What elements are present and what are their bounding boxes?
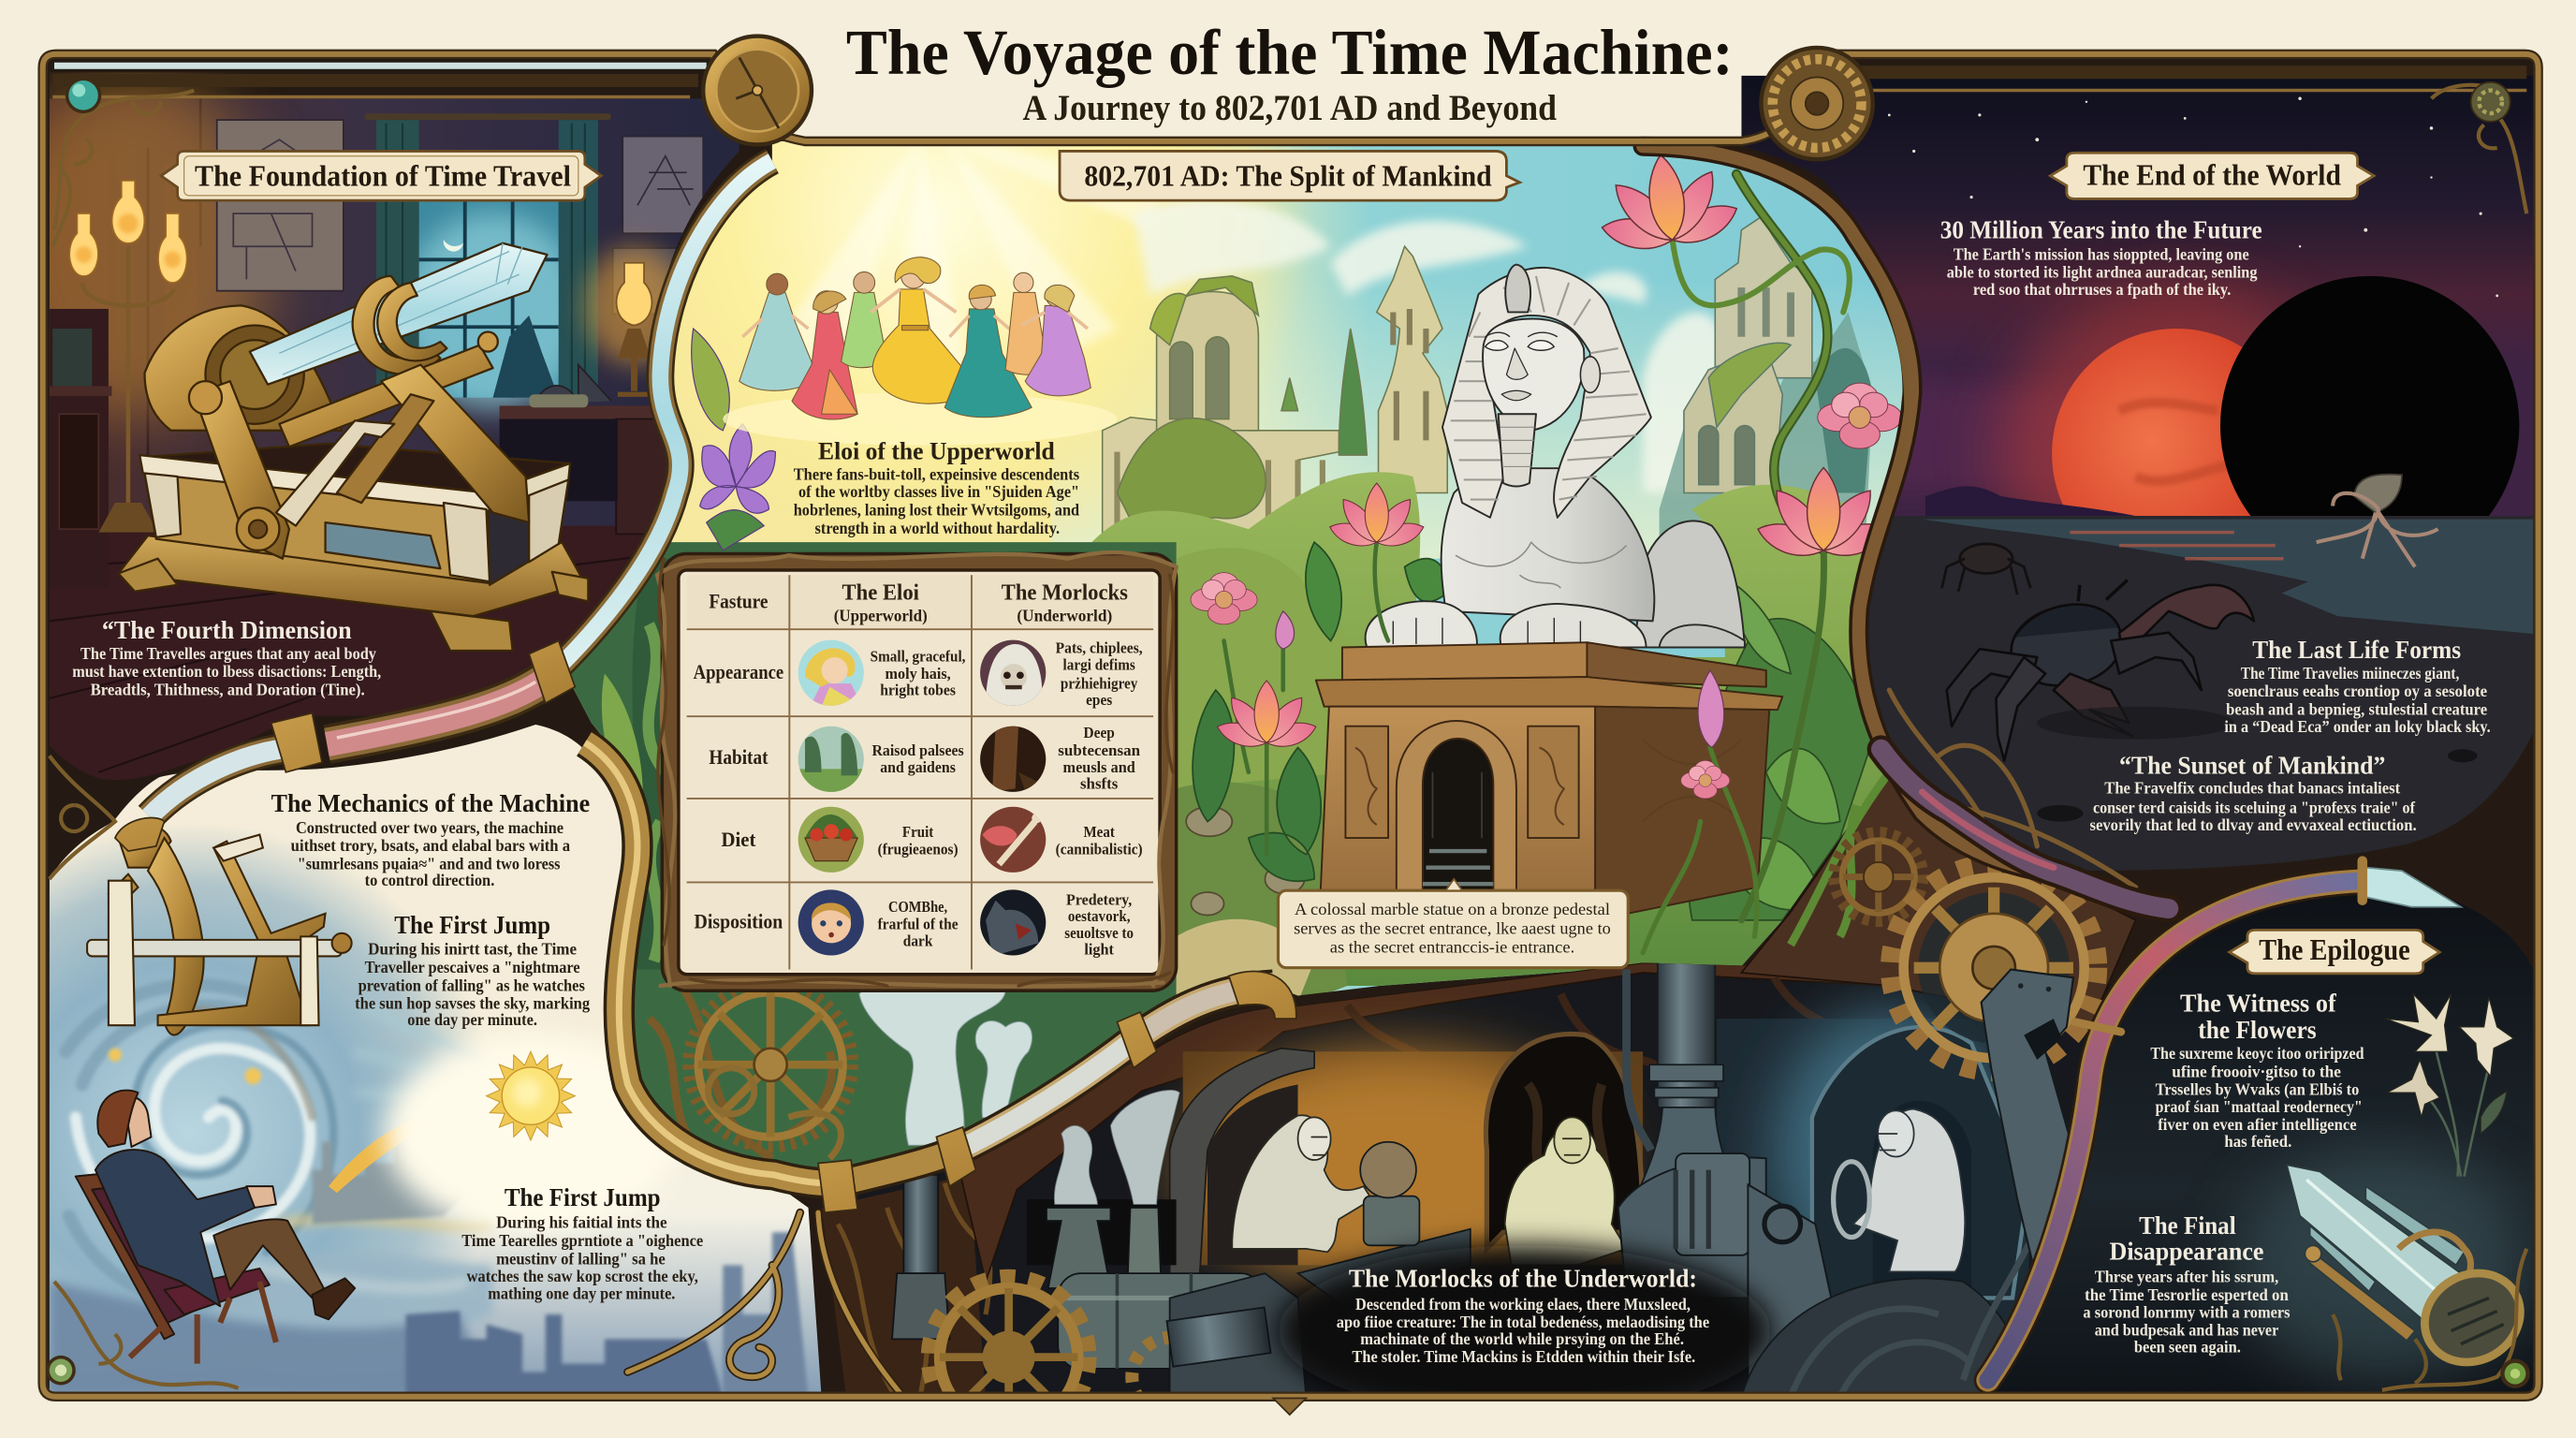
text: mechanics of the machine: The Mechanics of the Machine	[271, 789, 590, 817]
callout: sphinx statue: as the secret entranccis-ie entrance.	[1330, 938, 1574, 957]
cell text: eloi: Small, graceful,	[871, 648, 965, 666]
text: the first jump (second): watches the saw kop scrost the eky,	[466, 1267, 698, 1285]
text: witness of the flowers: fiver on even afier intelligence	[2158, 1115, 2357, 1134]
cell text: morlocks: light	[1084, 941, 1114, 959]
heading: the fourth dimension: Breadtls, Thithness, and Doration (Tine).	[91, 680, 365, 698]
icon: small gear top right	[2471, 82, 2510, 122]
panel: comparison table	[657, 552, 1177, 987]
table headers: (Upperworld)	[834, 606, 928, 625]
icon: teal gem	[66, 77, 101, 113]
icon: eloi habitat	[797, 725, 866, 795]
text: the first jump (second): mathing one day per minute.	[488, 1284, 675, 1302]
cell text: eloi: dark	[903, 932, 933, 950]
icon: green gem	[46, 1356, 76, 1385]
text: mechanics of the machine: "sumrlesans pųaia≈" and and two loress	[298, 854, 561, 873]
cell text: eloi: hright tobes	[880, 681, 957, 698]
text: 30 million years: The Earth's mission has sioppted, leaving one	[1954, 244, 2249, 263]
text: the final disappearance: Thrse years after his ssrum,	[2095, 1268, 2278, 1286]
row labels: Diet	[722, 828, 756, 851]
banner: the end of the world: The End of the World	[2083, 159, 2341, 192]
text: witness of the flowers: The suxreme keoyc itoo oriripzed	[2150, 1044, 2364, 1063]
row labels: Disposition	[695, 910, 783, 933]
armor clamp machine	[1982, 969, 2073, 1282]
text: the last life forms: The Time Travelies miineczes giant,	[2241, 664, 2459, 682]
icon: right gear gauge	[1761, 48, 1873, 159]
cell text: morlocks: prżhiehigrey	[1061, 674, 1138, 692]
text: witness of the flowers: the Flowers	[2198, 1016, 2317, 1044]
heading: eloi of the upperworld: strength in a world without hardality.	[815, 519, 1060, 537]
text: the first jump: prevation of falling" as he watches	[359, 976, 585, 994]
text: the sunset of mankind: sevorily that led to dlvay and evvaxeal ectiuction.	[2089, 815, 2417, 834]
epilogue tube with crystal	[1988, 861, 2461, 1380]
cold chamber	[1717, 1019, 2029, 1331]
cell text: eloi: Fruit	[902, 823, 934, 841]
desk	[500, 365, 681, 534]
right morlock	[1834, 1109, 1965, 1271]
warm chamber	[1183, 1051, 1643, 1265]
text: mechanics of the machine: uithset trory, bsats, and elabal bars with a	[291, 836, 570, 855]
brass gear lattice	[649, 983, 853, 1158]
text: morlocks: Descended from the working elaes, there Muxsleed,	[1355, 1295, 1690, 1313]
text: morlocks: apo fiioe creature: The in total bedenéss, melaodising the	[1337, 1313, 1709, 1331]
row labels: Appearance	[694, 660, 783, 683]
eloi dancers	[723, 257, 1117, 446]
heading: the fourth dimension: must have extention to lbess disactions: Length,	[72, 662, 381, 681]
text backdrop	[1278, 1245, 1771, 1416]
text: 30 million years	[1940, 215, 2262, 299]
text: mechanics of the machine: to control direction.	[365, 871, 494, 889]
panel: the end of the world	[1725, 72, 2546, 877]
cell text: morlocks: epes	[1086, 691, 1113, 709]
banner: the foundation of time travel: The Foundation of Time Travel	[195, 159, 571, 192]
text: morlocks	[1337, 1265, 1709, 1366]
icon: morlock portrait	[979, 638, 1048, 707]
title	[846, 17, 1734, 128]
text: the last life forms: beash and a bepnieg, stulestial creature	[2226, 699, 2487, 718]
middle morlock	[1505, 1117, 1627, 1265]
panel: the morlocks of the underworld	[805, 953, 2152, 1436]
text: the final disappearance: the Time Tesrorlie esperted on	[2085, 1285, 2289, 1304]
blueprint poster	[217, 120, 703, 314]
right machine	[1618, 1153, 1840, 1380]
squid creature	[2317, 475, 2438, 566]
table headers: The Morlocks	[1002, 580, 1128, 606]
crystal rod	[2287, 1165, 2537, 1384]
text: the first jump: Traveller pescaives a "nightmare	[365, 958, 580, 976]
cell text: morlocks: seuoltsve to	[1064, 924, 1134, 942]
cell text: eloi: moly hais,	[885, 665, 951, 682]
heading: eloi of the upperworld: hobrlenes, laning lost their Wvtsilgoms, and	[794, 501, 1079, 520]
root mass with gears	[1741, 769, 2136, 1282]
text: the first jump: one day per minute.	[407, 1010, 537, 1029]
text: 30 million years: able to storted its light ardnea auradcar, senling	[1947, 263, 2258, 282]
cell text: morlocks: shsfts	[1080, 774, 1119, 792]
heading: eloi of the upperworld	[794, 438, 1079, 537]
white flowers	[2385, 994, 2513, 1177]
text: the last life forms: soenclraus eeahs crontiop oy a sesolote	[2228, 682, 2487, 700]
text: the sunset of mankind: The Fravelfix concludes that banacs intaliest	[2104, 779, 2400, 798]
text: the first jump	[355, 911, 590, 1029]
purple iris	[692, 329, 775, 550]
callout: sphinx statue	[1278, 879, 1628, 968]
table headers: (Underworld)	[1017, 606, 1112, 625]
table headers	[709, 580, 1128, 625]
steam	[859, 980, 1032, 1145]
distant city	[313, 1117, 809, 1397]
banner: the foundation of time travel	[161, 151, 601, 200]
banner: 802,701 AD	[1060, 151, 1519, 200]
glass tube: left connection	[115, 161, 772, 851]
distant ruins right	[1684, 217, 1812, 493]
text: the first jump (second): meustinv of lalling" sa he	[496, 1249, 666, 1268]
light rays	[772, 138, 1166, 378]
cell text: morlocks: subtecensan	[1058, 741, 1140, 759]
distant ruins left	[1103, 246, 1447, 537]
cell text: morlocks: oestavork,	[1068, 907, 1131, 925]
icon: eloi child	[797, 888, 866, 958]
motion streak clouds	[50, 1218, 493, 1397]
text: witness of the flowers	[2150, 989, 2364, 1151]
distant haze trees	[1660, 312, 1873, 559]
text: the final disappearance: The Final	[2139, 1211, 2236, 1240]
text: the last life forms: in a “Dead Eca” onder an loky black sky.	[2224, 717, 2491, 736]
text: the last life forms	[2224, 636, 2491, 736]
cell text: morlocks: largi defims	[1063, 656, 1135, 674]
cell text: eloi: COMBhe,	[888, 898, 947, 916]
gear bottom	[929, 1278, 1211, 1436]
callout: sphinx statue: serves as the secret entrance, lke aaest ugne to	[1294, 918, 1611, 937]
heading: the fourth dimension: “The Fourth Dimension	[102, 616, 352, 644]
stars	[1888, 97, 2498, 297]
banner: the epilogue	[2230, 930, 2439, 974]
title: The Voyage of the Time Machine:	[846, 17, 1734, 88]
panel: the foundation of time travel	[0, 72, 739, 805]
cell text: morlocks: Pats, chiplees,	[1056, 639, 1143, 657]
title: A Journey to 802,701 AD and Beyond	[1023, 87, 1557, 128]
table headers: Fasture	[709, 589, 768, 612]
text: 30 million years: 30 Million Years into the Future	[1940, 215, 2262, 243]
text: the final disappearance: a sorond lonrımy with a romers	[2083, 1303, 2291, 1322]
text: morlocks: machinate of the world while prsying on the Ehé.	[1360, 1329, 1684, 1348]
vines	[1224, 174, 1850, 953]
vertical pipe	[1627, 960, 1741, 1224]
text: the first jump: During his inirtt tast, the Time	[368, 940, 577, 959]
icon: fruit basket	[797, 805, 866, 874]
heading: the fourth dimension	[72, 616, 381, 698]
table grid	[687, 575, 1153, 969]
banner: 802,701 AD: 802,701 AD: The Split of Mankind	[1084, 159, 1492, 192]
text: the final disappearance	[2083, 1211, 2291, 1356]
candelabra	[69, 181, 186, 533]
text: morlocks: The stoler. Time Mackins is Etdden within their Isfe.	[1352, 1347, 1695, 1366]
giant crab	[1947, 580, 2254, 761]
clouds	[1134, 198, 1727, 493]
seated time traveller	[76, 1091, 355, 1364]
row labels: Habitat	[709, 745, 768, 769]
text: mechanics of the machine: Constructed over two years, the machine	[296, 818, 564, 837]
text: the last life forms: The Last Life Forms	[2252, 636, 2461, 664]
sky streaks around the sun	[356, 1034, 463, 1097]
cell text: morlocks: Predetery,	[1066, 890, 1132, 908]
soil band	[958, 962, 1889, 1282]
cell text: morlocks: meusls and	[1063, 758, 1135, 776]
text: the sunset of mankind: “The Sunset of Mankind”	[2119, 752, 2385, 780]
heading: eloi of the upperworld: of the worltby classes live in "Sjuiden Age"	[798, 482, 1079, 501]
text: the first jump (second): Time Tearelles gprntiote a "oighence	[461, 1231, 703, 1250]
vine wall between scenes	[1643, 146, 2136, 888]
lever mechanism	[87, 825, 352, 1035]
dark roots behind chimneys	[822, 1175, 986, 1397]
cell text: eloi	[871, 648, 965, 950]
foreground bushes	[1177, 542, 1449, 1051]
gnarled pipes lower right	[1741, 1279, 2019, 1397]
text: witness of the flowers: praof śıan "mattaal reodernecy"	[2156, 1097, 2363, 1116]
text: witness of the flowers: Trsselles by Wvaks (an Elbiś to	[2156, 1080, 2359, 1099]
text: the sunset of mankind	[2089, 752, 2417, 834]
small crab	[1942, 544, 2030, 594]
left machine pipes	[1166, 1273, 1306, 1397]
text: the first jump (second): During his faitial ints the	[496, 1213, 667, 1232]
text: the first jump: The First Jump	[394, 911, 550, 939]
text: 30 million years: red soo that ohrruses a fpath of the iky.	[1973, 280, 2231, 299]
icon: morlock habitat	[979, 725, 1048, 795]
cell text: morlocks: (cannibalistic)	[1056, 840, 1143, 858]
text: witness of the flowers: ufine froooiv·gitso to the	[2172, 1063, 2341, 1081]
table vine frame	[657, 552, 1177, 987]
time vortex swirl	[66, 985, 333, 1302]
text: mechanics of the machine	[271, 789, 590, 889]
text: witness of the flowers: The Witness of	[2180, 989, 2337, 1017]
icon: meat and bone	[979, 805, 1048, 874]
cell text: morlocks	[1056, 639, 1143, 959]
cell text: eloi: and gaidens	[880, 758, 957, 776]
table headers: The Eloi	[842, 580, 919, 606]
cell text: eloi: (frugieaenos)	[878, 840, 959, 858]
text: the first jump (second)	[461, 1183, 703, 1302]
heading: the fourth dimension: The Time Travelles argues that any aeal body	[80, 644, 376, 663]
black disk	[2220, 276, 2519, 575]
text: witness of the flowers: has feñed.	[2224, 1132, 2291, 1151]
desk lamp	[585, 246, 683, 394]
panel: the mechanics of the machine	[50, 723, 838, 1405]
big gear	[1892, 866, 2096, 1070]
cell text: morlocks: Meat	[1083, 823, 1115, 841]
text: the sunset of mankind: conser terd caisids its sceluing a "profexs traie" of	[2093, 799, 2416, 817]
pedestal	[1316, 642, 1782, 920]
icon: eloi portrait	[797, 638, 866, 707]
small gear	[1834, 832, 1923, 921]
ornate brass branches	[627, 1212, 900, 1393]
text: the first jump (second): The First Jump	[505, 1183, 661, 1211]
left morlock	[1232, 1115, 1372, 1252]
sun	[385, 1035, 681, 1232]
icon: morlock beast	[979, 888, 1048, 958]
flowers	[1191, 145, 1902, 799]
banner: the epilogue: The Epilogue	[2259, 933, 2410, 966]
heading: eloi of the upperworld: There fans-buit-toll, expeinsive descendents	[794, 464, 1079, 483]
purple tube	[1881, 749, 2169, 909]
text: the final disappearance: and budpesak and has never	[2095, 1320, 2278, 1339]
cell text: morlocks: Deep	[1083, 724, 1115, 741]
red sun	[2052, 329, 2302, 579]
chimneys with smoke	[892, 1091, 1264, 1369]
icon: left gauge	[703, 37, 812, 144]
panel: 802,701 AD split of mankind	[559, 138, 1939, 1216]
workbench lathe	[1298, 1142, 1471, 1314]
text: the first jump: the sun hop savses the sky, marking	[355, 994, 590, 1013]
sun trail	[329, 1123, 404, 1193]
hills and ground	[1084, 472, 1889, 986]
bookshelf	[50, 309, 111, 588]
window and curtains	[365, 113, 611, 411]
time machine	[118, 243, 588, 651]
sphinx statue	[1366, 265, 1745, 647]
brass and glass tube: lower connection	[585, 742, 1296, 1212]
callout: sphinx statue: A colossal marble statue on a bronze pedestal	[1295, 900, 1610, 918]
panel: the epilogue	[1971, 871, 2539, 1405]
corner ornaments	[52, 91, 194, 246]
cell text: eloi: frarful of the	[878, 916, 959, 933]
banner: the end of the world	[2050, 153, 2374, 198]
text: the final disappearance: Disappearance	[2110, 1237, 2263, 1265]
heading: eloi of the upperworld: Eloi of the Upperworld	[818, 438, 1055, 465]
row labels	[694, 660, 783, 933]
text: the final disappearance: been seen again.	[2134, 1337, 2241, 1356]
icon: green gem right	[2500, 1358, 2530, 1388]
cell text: eloi: Raisod palsees	[871, 741, 964, 759]
sea	[1808, 516, 2546, 877]
text: morlocks: The Morlocks of the Underworld:	[1349, 1265, 1697, 1293]
